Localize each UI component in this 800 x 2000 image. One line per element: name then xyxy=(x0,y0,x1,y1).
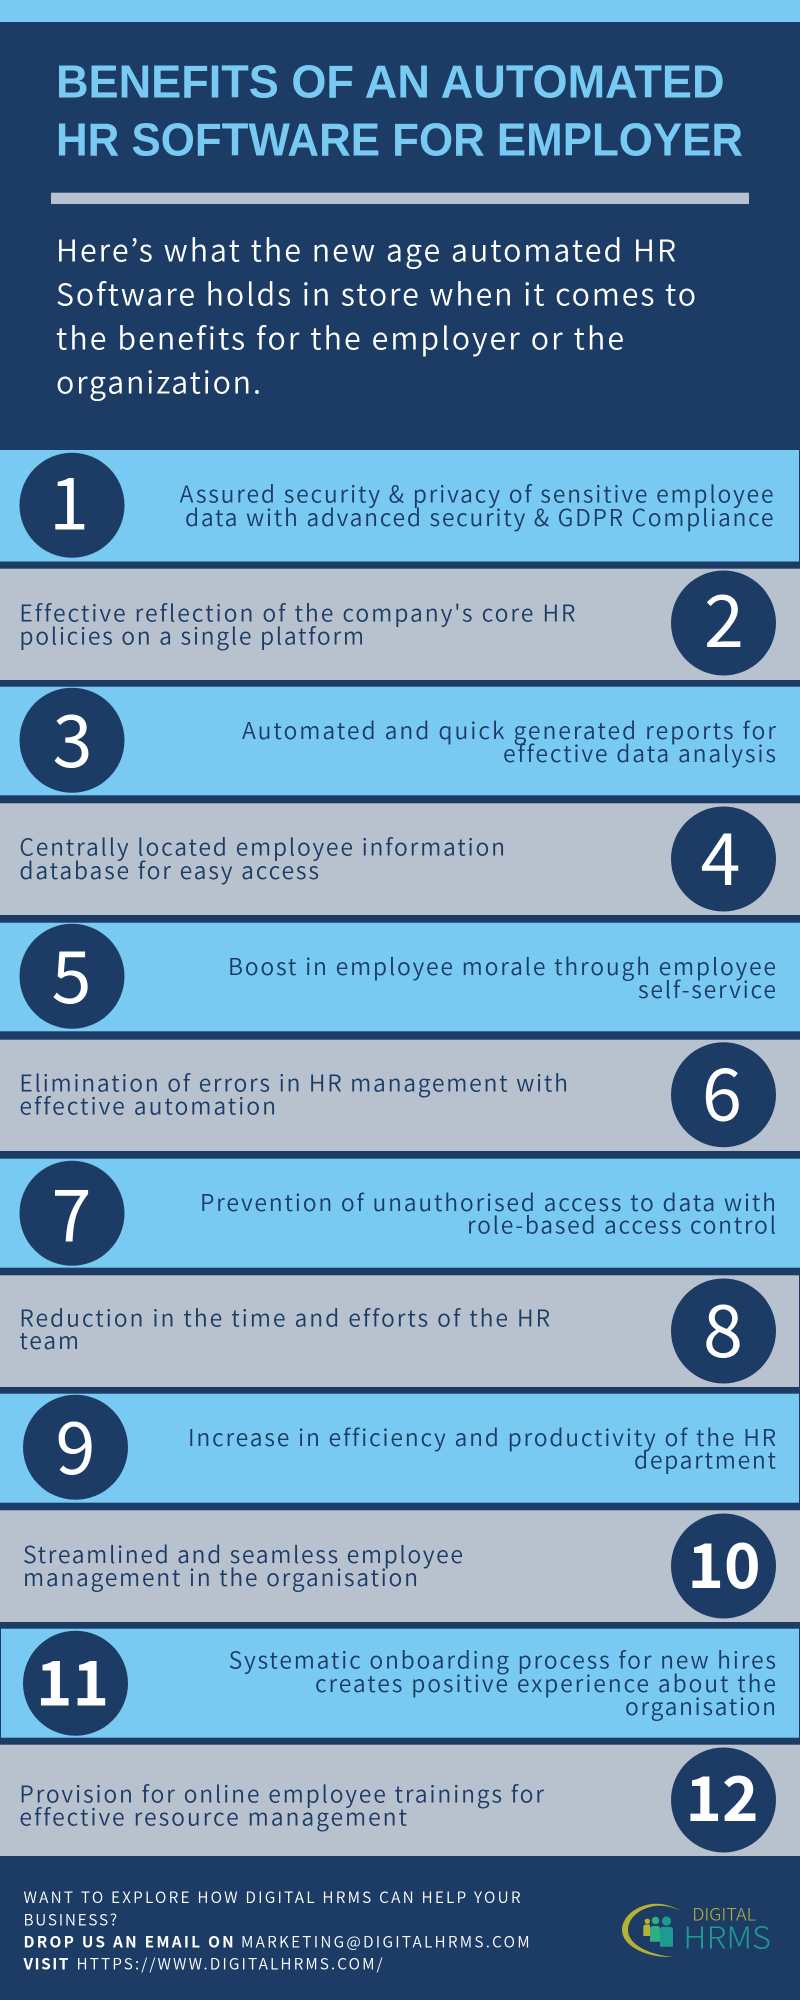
number badge 5 xyxy=(20,919,124,1029)
title: BENEFITS OF AN AUTOMATED xyxy=(56,55,724,107)
number badge 11 xyxy=(23,1631,128,1736)
benefit text 11: creates positive experience about the xyxy=(315,1665,776,1699)
benefit text 7: Prevention of unauthorised access to data with xyxy=(200,1184,776,1218)
footer call to action: MARKETING@DIGITALHRMS.COM xyxy=(241,1930,530,1952)
benefit text 8 xyxy=(19,1300,550,1356)
number badge 12 xyxy=(671,1748,776,1852)
panel: benefit 11 xyxy=(1,1629,799,1738)
benefit text 5: self-service xyxy=(638,971,776,1005)
benefit text 9 xyxy=(188,1419,776,1476)
benefit text 2: policies on a single platform xyxy=(19,617,364,651)
panel: benefit 1 xyxy=(0,445,799,562)
footer call to action xyxy=(22,1886,530,1974)
number badge 2: 2 xyxy=(704,563,744,668)
panel: benefit 5 xyxy=(0,919,800,1031)
benefit text 1: data with advanced security & GDPR Compliance xyxy=(185,499,774,533)
intro paragraph: organization. xyxy=(56,358,261,402)
row background 12 xyxy=(0,1745,800,1856)
number badge 6: 6 xyxy=(702,1037,742,1142)
footer call to action: DROP US AN EMAIL ON xyxy=(24,1930,234,1952)
logo wordmark HRMS: HRMS xyxy=(683,1913,771,1957)
panel: benefit 3 xyxy=(0,683,800,795)
number badge 1: 1 xyxy=(49,445,89,550)
benefit text 7 xyxy=(200,1184,776,1241)
logo people icon xyxy=(643,1916,673,1947)
panel: benefit 7 xyxy=(0,1158,800,1268)
panel: benefit 12 xyxy=(0,1745,800,1856)
benefit text 8: Reduction in the time and efforts of the HR xyxy=(19,1300,550,1334)
benefit text 3: effective data analysis xyxy=(503,735,776,769)
panel: benefit 6 xyxy=(0,1037,800,1151)
benefit text 4: database for easy access xyxy=(19,852,319,886)
intro paragraph: the benefits for the employer or the xyxy=(56,314,624,358)
benefit text 3 xyxy=(242,712,776,769)
benefit text 10: management in the organisation xyxy=(23,1559,418,1593)
row background 4 xyxy=(0,803,800,915)
number badge 1 xyxy=(20,445,124,558)
footer call to action: BUSINESS? xyxy=(24,1908,117,1930)
number badge 5: 5 xyxy=(52,919,91,1024)
panel: benefit 9 xyxy=(0,1390,799,1503)
benefit text 12: Provision for online employee trainings for xyxy=(19,1776,544,1810)
benefit text 4 xyxy=(19,829,505,886)
benefit text 12 xyxy=(19,1776,544,1833)
benefit text 2: Effective reflection of the company's core HR xyxy=(19,595,575,629)
panel: benefit 2 xyxy=(0,563,800,680)
number badge 3: 3 xyxy=(53,683,92,788)
footer call to action: VISIT xyxy=(22,1952,69,1974)
number badge 7: 7 xyxy=(52,1158,91,1263)
row background 1 xyxy=(0,450,799,562)
benefit text 12: effective resource management xyxy=(19,1799,407,1833)
title: HR SOFTWARE FOR EMPLOYER xyxy=(56,113,743,165)
benefit text 10 xyxy=(23,1536,463,1593)
row background 8 xyxy=(0,1275,799,1387)
logo wordmark DIGITAL: DIGITAL xyxy=(692,1901,756,1926)
number badge 8: 8 xyxy=(703,1273,743,1378)
benefit text 1 xyxy=(180,476,774,533)
footer call to action: WANT TO EXPLORE HOW DIGITAL HRMS CAN HELP YOUR xyxy=(24,1886,521,1908)
header divider bar xyxy=(51,193,749,204)
intro paragraph: Software holds in store when it comes to xyxy=(56,270,696,314)
benefit text 7: role-based access control xyxy=(467,1207,776,1241)
row background 7 xyxy=(0,1159,800,1268)
intro paragraph xyxy=(56,227,696,402)
row background 6 xyxy=(0,1040,800,1151)
top accent band xyxy=(0,0,800,22)
benefit text 8: team xyxy=(19,1322,79,1356)
footer call to action: HTTPS://WWW.DIGITALHRMS.COM/ xyxy=(76,1952,383,1974)
benefit text 3: Automated and quick generated reports for xyxy=(242,712,776,746)
benefit text 1: Assured security & privacy of sensitive employee xyxy=(180,476,774,510)
benefit text 10: Streamlined and seamless employee xyxy=(23,1536,463,1570)
logo crescent xyxy=(622,1904,682,1957)
number badge 10 xyxy=(671,1514,776,1618)
benefit text 6 xyxy=(19,1065,568,1122)
panel: benefit 8 xyxy=(0,1273,799,1387)
row background 3 xyxy=(0,687,800,795)
number badge 11: 11 xyxy=(36,1634,109,1724)
benefit text 11: Systematic onboarding process for new hires xyxy=(229,1642,776,1676)
number badge 4: 4 xyxy=(701,801,740,906)
number badge 10: 10 xyxy=(687,1516,761,1606)
benefit text 5: Boost in employee morale through employee xyxy=(228,948,776,982)
number badge 2 xyxy=(671,563,776,676)
benefit text 5 xyxy=(228,948,776,1005)
number badge 12: 12 xyxy=(685,1749,759,1839)
panel: benefit 4 xyxy=(0,801,800,915)
benefit text 6: effective automation xyxy=(19,1088,276,1122)
benefit text 11: organisation xyxy=(625,1688,776,1722)
title xyxy=(56,55,743,165)
number badge 3 xyxy=(20,683,124,793)
number badge 7 xyxy=(20,1158,124,1266)
benefit text 2 xyxy=(19,595,575,651)
row background 5 xyxy=(0,923,800,1031)
number badge 4 xyxy=(671,801,776,912)
benefit text 4: Centrally located employee information xyxy=(19,829,505,863)
row background 2 xyxy=(0,569,800,680)
row background 9 xyxy=(0,1394,799,1503)
row background 10 xyxy=(0,1510,800,1622)
number badge 9 xyxy=(23,1390,128,1500)
benefit text 11 xyxy=(229,1642,776,1722)
benefit text 9: department xyxy=(634,1442,776,1476)
number badge 6 xyxy=(671,1037,776,1147)
logo: Digital HRMS xyxy=(622,1901,771,1957)
intro paragraph: Here’s what the new age automated HR xyxy=(56,227,676,271)
number badge 9: 9 xyxy=(56,1390,95,1495)
number badge 8 xyxy=(671,1273,776,1384)
benefit text 6: Elimination of errors in HR management with xyxy=(19,1065,568,1099)
panel: benefit 10 xyxy=(0,1510,800,1622)
benefit text 9: Increase in efficiency and productivity of the HR xyxy=(188,1419,776,1453)
row background 11 xyxy=(1,1629,799,1738)
